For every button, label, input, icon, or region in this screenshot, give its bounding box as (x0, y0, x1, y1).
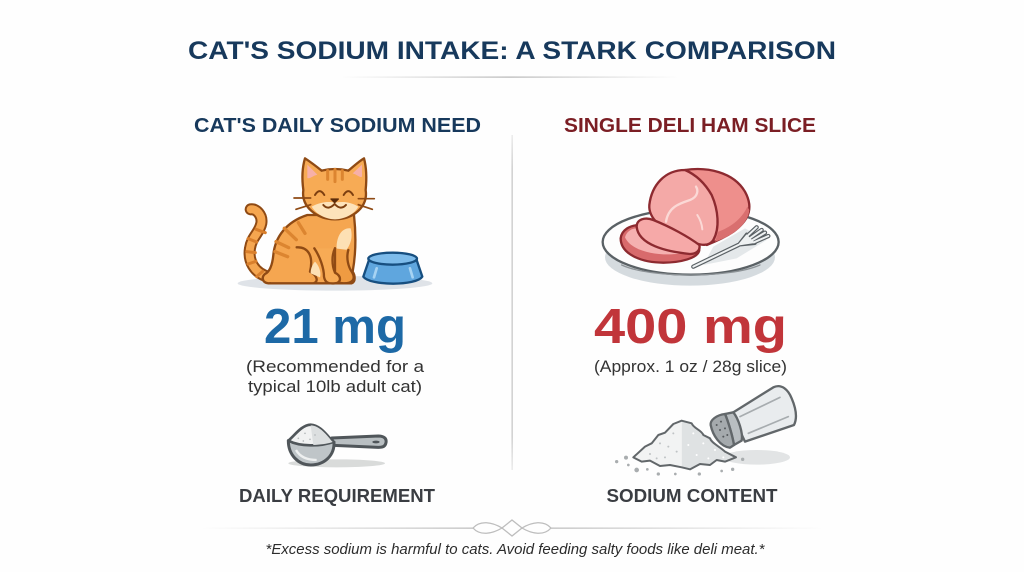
footer divider ornament (200, 520, 825, 536)
icon: ham on a plate with fork (603, 169, 779, 286)
note: slice size: (Approx. 1 oz / 28g slice) (594, 357, 787, 376)
value: 400 mg: 400 mg (594, 300, 787, 354)
icon: salt shaker and spilled salt (615, 386, 796, 476)
note: recommended amount: (Recommended for a (246, 357, 425, 376)
label: daily requirement: DAILY REQUIREMENT (239, 485, 436, 506)
icon: scoop of salt (288, 425, 386, 467)
label: sodium content: SODIUM CONTENT (606, 485, 778, 506)
heading: cat's daily sodium need: CAT'S DAILY SODIUM NEED (194, 115, 481, 137)
note: recommended amount: typical 10lb adult cat) (248, 377, 422, 396)
icon: orange cat with blue bowl (238, 158, 432, 291)
note: recommended amount (246, 357, 425, 396)
footnote: *Excess sodium is harmful to cats. Avoid feeding salty foods like deli meat.* (266, 542, 766, 558)
panel: cat's daily sodium need (194, 115, 481, 506)
heading: single deli ham slice: SINGLE DELI HAM SLICE (564, 115, 816, 137)
value: 21 mg: 21 mg (264, 300, 406, 354)
title: CAT'S SODIUM INTAKE: A STARK COMPARISON (188, 37, 836, 65)
panel: single deli ham slice (564, 115, 816, 506)
